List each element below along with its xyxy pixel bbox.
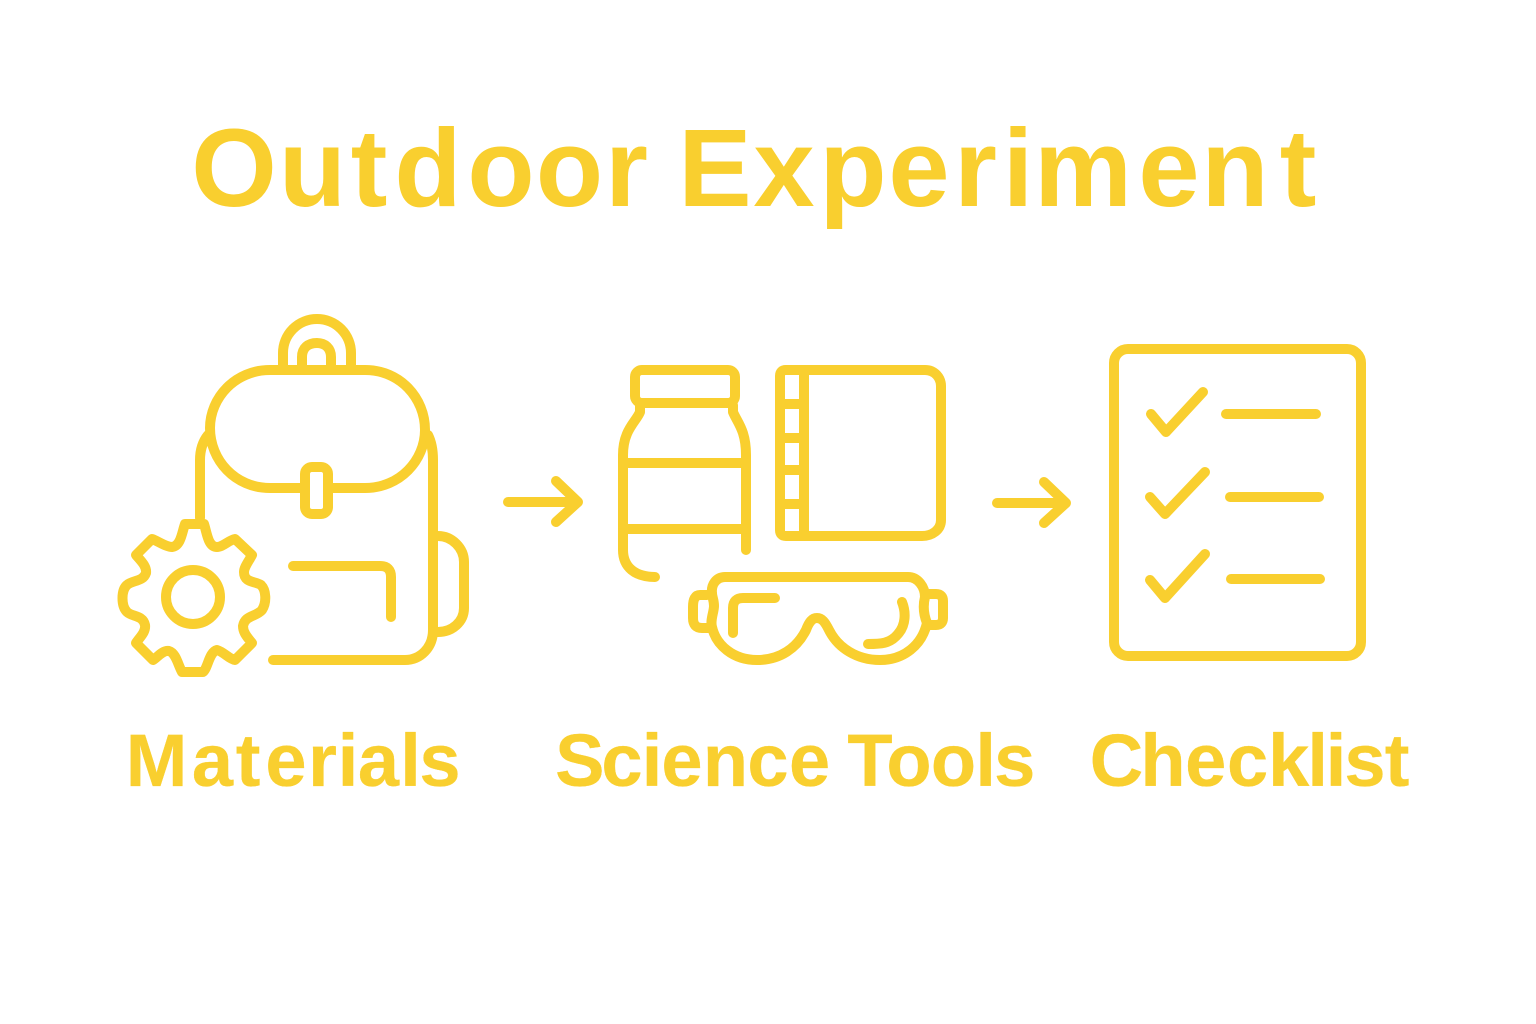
icon: checklist	[1114, 349, 1361, 656]
jar label bands	[623, 463, 746, 529]
backpack flap	[210, 370, 425, 488]
icon: backpack with gear	[122, 319, 464, 672]
icon: jar	[623, 370, 746, 577]
jar body	[623, 405, 746, 577]
side pocket	[433, 536, 464, 632]
front pocket	[293, 566, 391, 617]
gear hub	[166, 570, 220, 624]
right strap	[928, 594, 943, 625]
backpack clasp	[305, 467, 328, 514]
notebook cover	[780, 370, 941, 536]
gear	[122, 524, 265, 672]
arrow: materials to science tools	[508, 481, 578, 522]
icon: notebook	[780, 370, 941, 536]
lens glare	[733, 598, 905, 644]
notebook spine	[780, 370, 804, 536]
backpack body	[200, 435, 433, 660]
backpack handle	[283, 319, 351, 368]
goggles frame	[711, 577, 927, 660]
check item 1	[1151, 392, 1316, 432]
arrow: science tools to checklist	[997, 482, 1066, 523]
label: materials: Materials	[126, 719, 461, 802]
jar lid	[635, 370, 735, 403]
icon: safety goggles	[693, 577, 943, 660]
label: science tools: Science Tools	[555, 719, 1035, 802]
title: Outdoor Experiment	[191, 107, 1316, 230]
left strap	[693, 595, 710, 628]
checklist board	[1114, 349, 1361, 656]
check item 2	[1150, 472, 1319, 514]
check item 3	[1150, 554, 1320, 598]
label: checklist: Checklist	[1090, 719, 1409, 802]
